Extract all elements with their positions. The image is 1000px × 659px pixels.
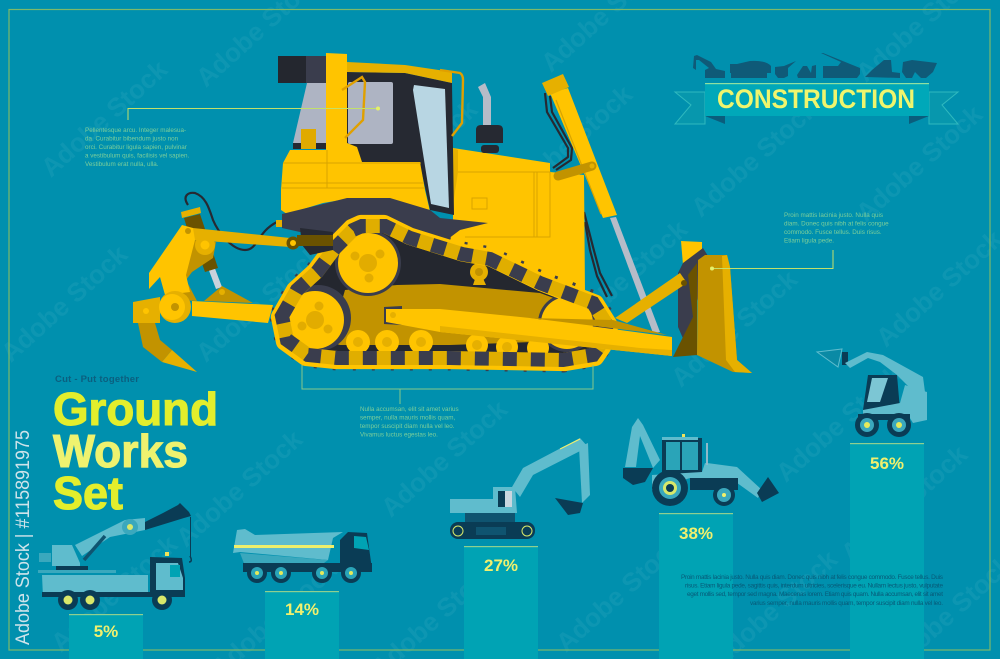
text: Adobe Stock (190, 239, 328, 368)
callout text: bottom: Vivamus luctus egestas leo. (360, 432, 438, 438)
callout text: bottom: Nulla accumsan, elit sit amet varius (360, 406, 459, 413)
text: Adobe Stock (555, 214, 693, 343)
title: Set (53, 467, 123, 519)
upper roller (470, 263, 488, 285)
callout text: bottom: semper, nulla mauris mollis quam, (360, 414, 455, 422)
callout text: left: Vestibulum erat nulla, ulla. (85, 161, 159, 168)
callout: cab (85, 106, 380, 168)
bar: 27% (464, 546, 538, 659)
callout text: bottom (360, 406, 459, 438)
vehicle: excavator (450, 438, 590, 539)
ribbon body (705, 83, 929, 116)
body copy: bottom right (681, 574, 943, 607)
push arm (384, 306, 672, 356)
callout text: right: diam. Donec quis nibh at felis congue (784, 220, 889, 228)
text: Adobe Stock (835, 439, 973, 568)
callout text: right: Proin mattis lacinia justo. Nulla quis (784, 212, 883, 219)
ribbon tails (675, 92, 958, 124)
bar chart: percentage columns (69, 443, 924, 659)
callout text: right (784, 212, 889, 244)
title: Works (53, 425, 188, 477)
text: Adobe Stock (35, 54, 173, 183)
silhouettes of machines (693, 53, 937, 78)
bar: 56%: 56% (870, 454, 904, 473)
vehicle: crane truck (38, 503, 191, 610)
subtitle: Cut - Put together (55, 374, 139, 385)
body copy: bottom right: eget mollis sed, tempor sed magna. Maecenas lorem. Etiam quis quam. Nulla accumsan, elit sit amet (687, 591, 943, 598)
front idler (538, 294, 596, 352)
vehicle: skid loader (817, 349, 927, 437)
bulldozer illustration (133, 53, 752, 373)
callout text: left: Pellentesque arcu. Integer malesua- (85, 127, 186, 134)
hydraulic hoses behind body (186, 93, 612, 297)
text: Adobe Stock (770, 359, 908, 488)
callout text: left: a vestibulum quis, facilisis vel sapien. (85, 152, 190, 160)
vehicle: backhoe loader (623, 418, 779, 506)
callout text: left: orci. Curabitur ligula sapien, pulvinar (85, 144, 187, 151)
body copy: bottom right: varius semper, nulla mauris mollis quam, tempor suscipit diam nulla vel leo. (750, 600, 943, 607)
rear ripper (133, 207, 333, 372)
callout: blade (710, 212, 889, 270)
callout text: left: da. Curabitur bibendum justo non (85, 136, 179, 142)
callout text: right: Etiam ligula pede. (784, 238, 834, 244)
idler wheel (335, 230, 401, 296)
text: Adobe Stock (850, 99, 988, 228)
track chain (279, 224, 610, 362)
lift cylinder (542, 74, 660, 333)
text: Adobe Stock (550, 529, 688, 658)
bar: 5% (69, 614, 143, 659)
stock id vertical text: Adobe Stock | #115891975 (13, 430, 34, 645)
exhaust and air cleaner (476, 83, 503, 153)
title: Ground (53, 383, 218, 435)
bar: 56% (850, 443, 924, 659)
body copy: bottom right: risus. Etiam ligula pede, sagittis quis, interdum ultricies, scelerisque eu. Nullam lectus justo, vulputate (685, 582, 943, 590)
text: Adobe Stock (45, 529, 183, 658)
bar: 38%: 38% (679, 524, 713, 543)
bottom rollers (346, 330, 549, 359)
drive wheel (285, 285, 351, 351)
text: Adobe Stock (685, 94, 823, 223)
track assembly (279, 224, 610, 362)
title (53, 383, 218, 519)
bar: 27%: 27% (484, 556, 518, 575)
text: Adobe Stock (500, 79, 638, 208)
callout: tracks (302, 365, 593, 438)
vehicle: dump truck (233, 529, 372, 583)
callout text: left (85, 127, 190, 168)
text: Adobe Stock (665, 264, 803, 393)
bar: 5%: 5% (94, 622, 118, 641)
operator cab (276, 53, 488, 245)
bar: 14%: 14% (285, 600, 319, 619)
callout text: right: commodo. Fusce tellus. Duis risus. (784, 229, 882, 236)
bar: 38% (659, 513, 733, 659)
badge heading: CONSTRUCTION (717, 84, 915, 114)
engine body (440, 148, 585, 295)
text: Adobe Stock (345, 94, 483, 223)
callout text: bottom: tempor suscipit diam nulla vel leo. (360, 423, 455, 430)
text: Adobe Stock (375, 394, 513, 523)
text: Adobe Stock (170, 424, 308, 553)
dozer blade (615, 241, 752, 373)
construction badge (675, 53, 958, 124)
bar: 14% (265, 591, 339, 659)
body copy: bottom right: Proin mattis lacinia justo. Nulla quis diam. Donec quis nibh at felis congue commodo. Fusce tellus. Duis (681, 574, 943, 581)
